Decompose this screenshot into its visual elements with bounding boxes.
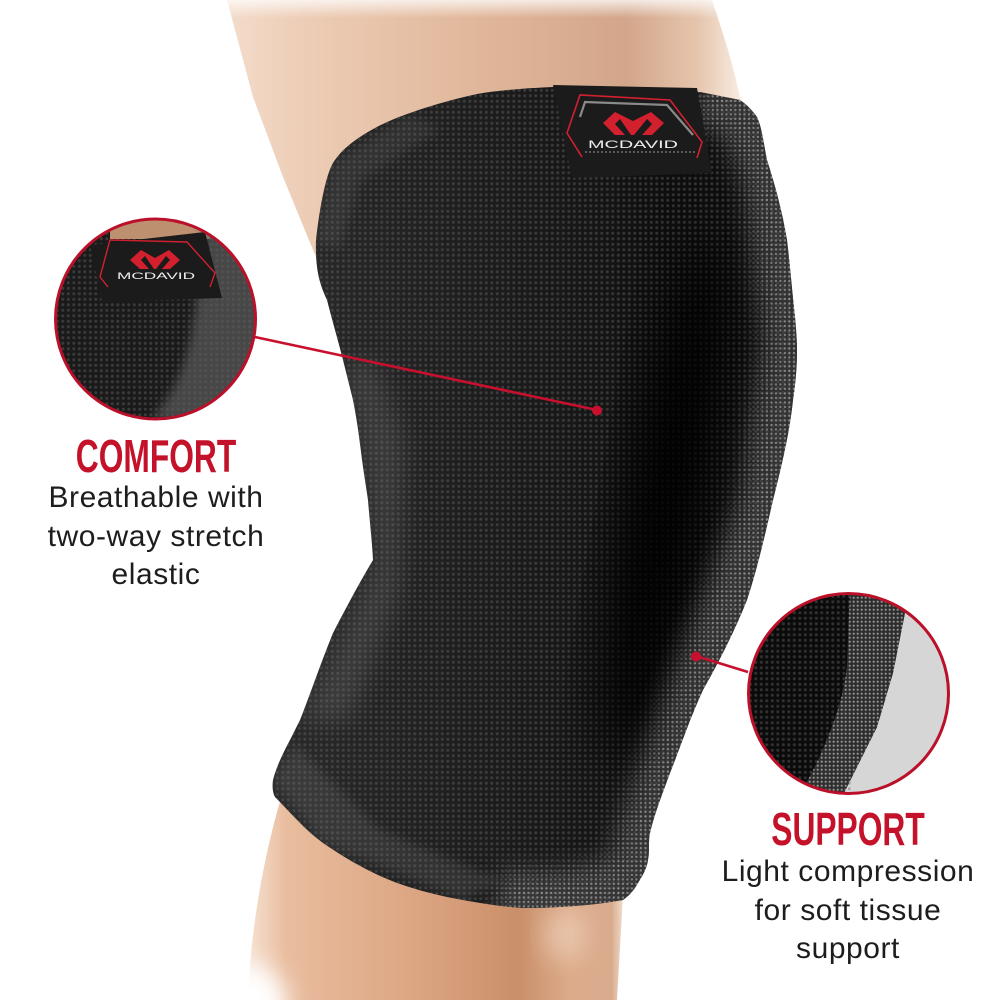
brand label on sleeve: MCDAVID (588, 139, 678, 151)
text: support description: Light compression (722, 855, 974, 888)
text: support description (722, 855, 974, 965)
lower leg skin (203, 795, 623, 1000)
heading: comfort: COMFORT (76, 430, 236, 482)
circle detail: comfort (50, 215, 265, 425)
text: support description: support (796, 932, 900, 965)
callout line: support (691, 652, 748, 672)
label in circle: MCDAVID (117, 271, 195, 282)
knee sleeve (260, 80, 820, 920)
callout line: comfort (250, 336, 602, 416)
text: comfort description: Breathable with (48, 481, 264, 514)
thigh skin (227, 0, 745, 262)
label in circle (90, 232, 222, 302)
text: support description: for soft tissue (755, 894, 941, 926)
circle detail: support (745, 590, 948, 795)
text: comfort description: elastic (112, 558, 200, 591)
text: comfort description (48, 481, 264, 591)
text: comfort description: two-way stretch (48, 520, 264, 552)
brand label on sleeve (553, 85, 712, 178)
heading: support: SUPPORT (771, 803, 925, 855)
